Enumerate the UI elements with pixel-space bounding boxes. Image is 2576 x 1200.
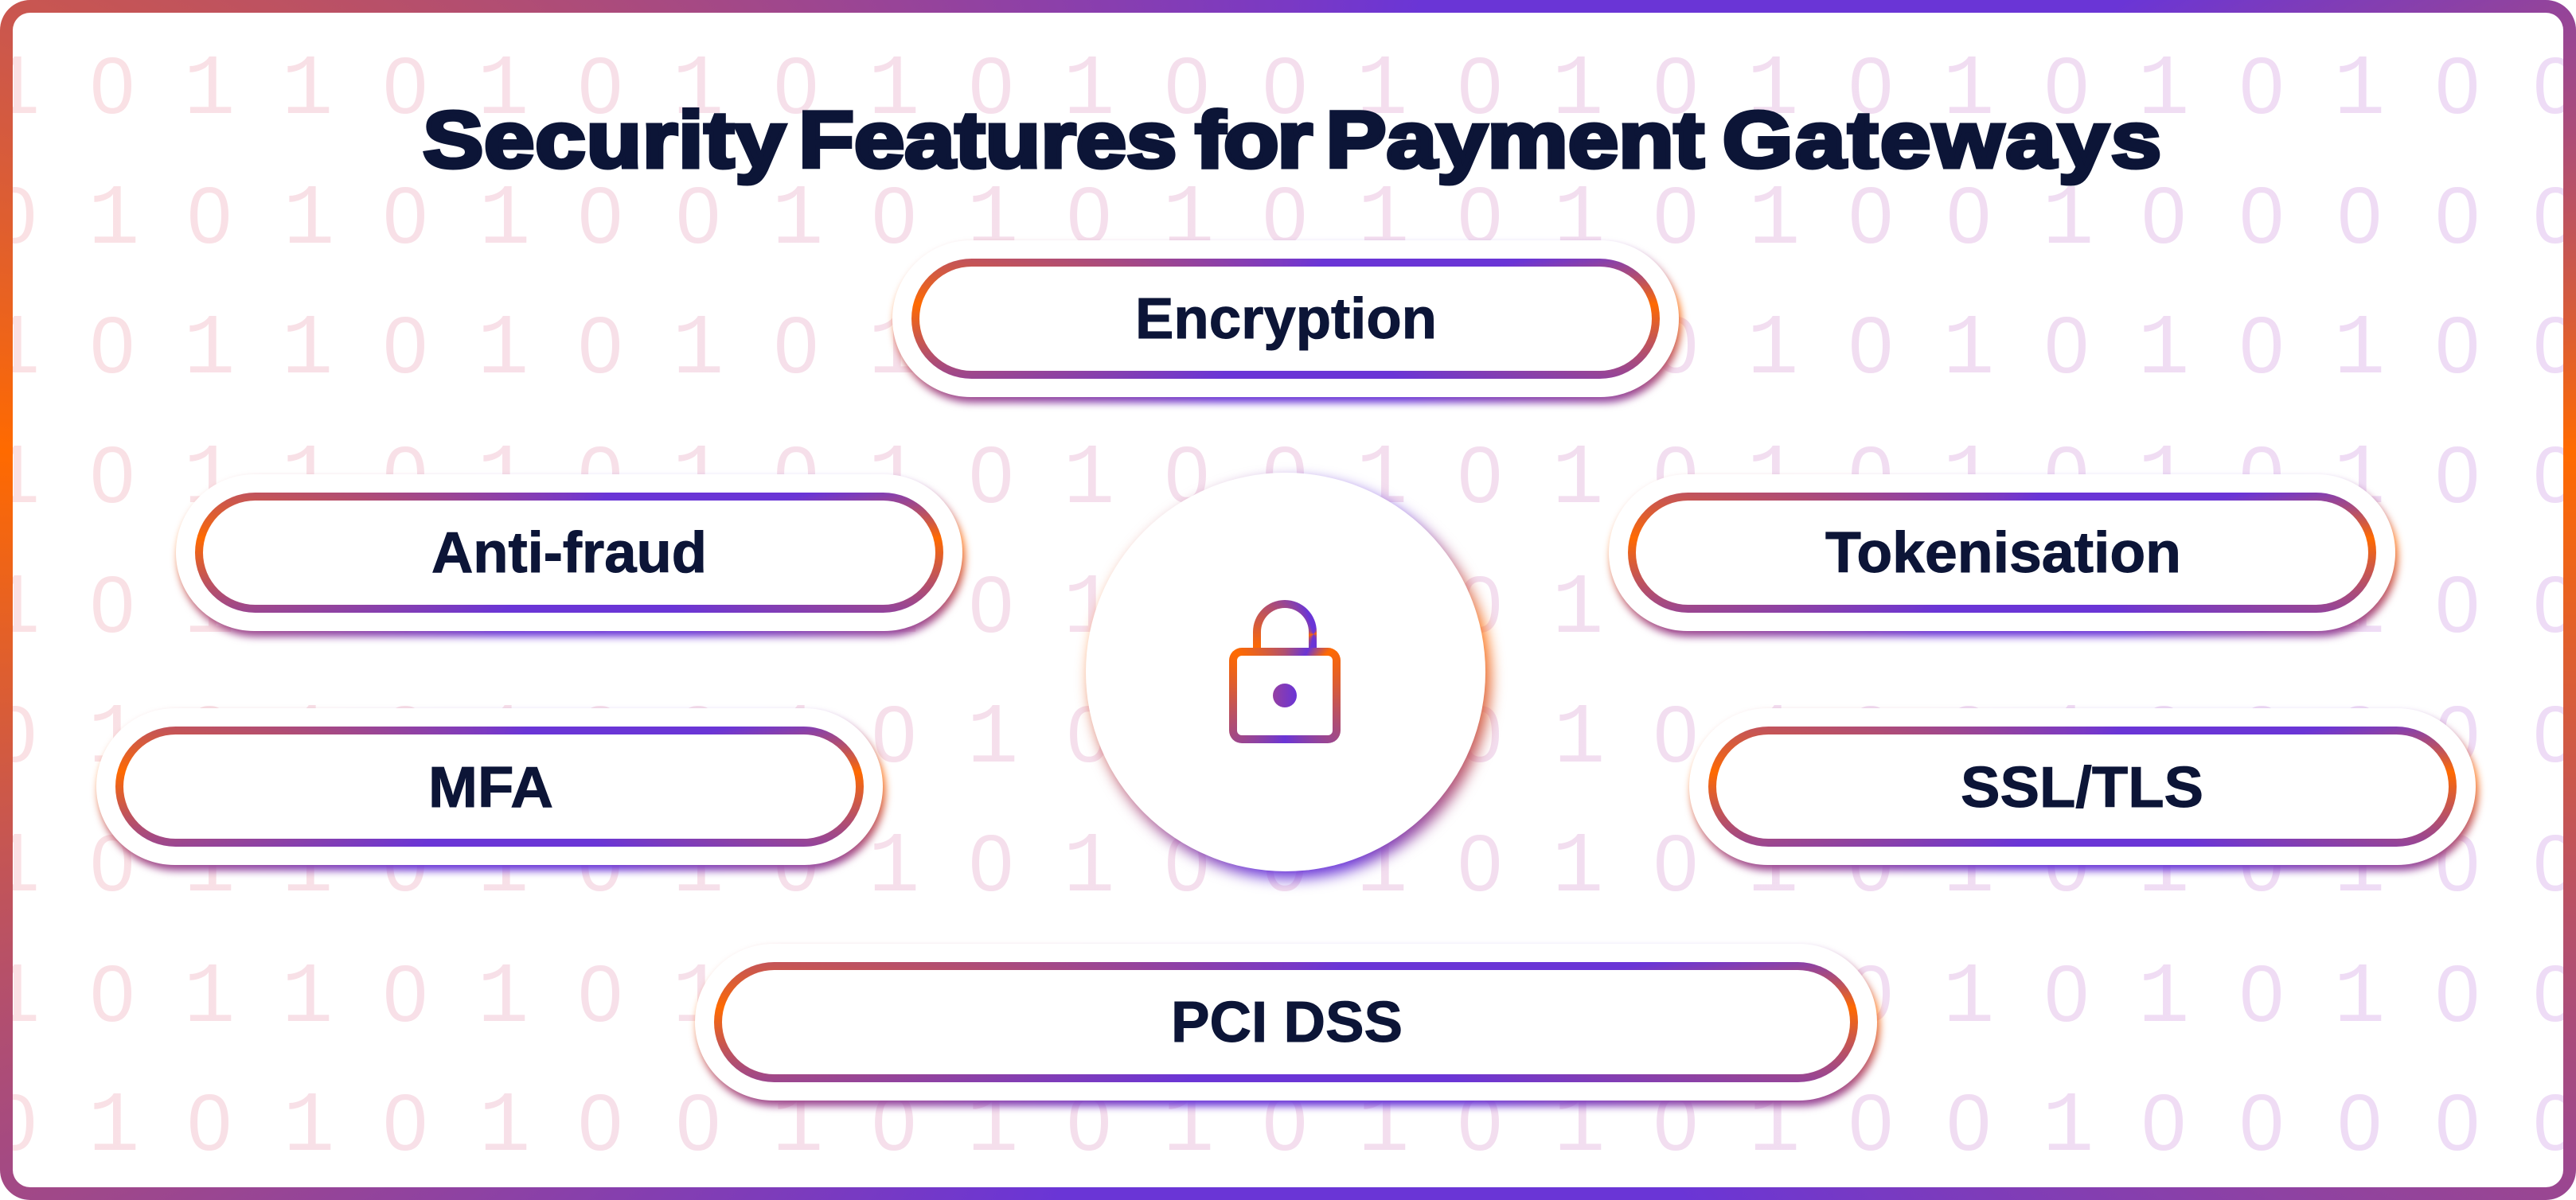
label: Encryption: Encryption [1135, 287, 1437, 351]
pill: PCI DSS [691, 942, 1887, 1112]
title: Gateways [1723, 95, 2164, 184]
binary digit pattern: 1111111111 [88, 691, 2094, 788]
binary digit pattern: 1111111111 [88, 172, 2094, 269]
binary digit pattern: 1111111111111 [13, 42, 2385, 139]
binary digit pattern: 1111111111111 [13, 561, 2385, 658]
label: MFA: MFA [428, 756, 553, 820]
pill: Anti-fraud [172, 473, 971, 643]
binary digit pattern: 00000000000000000 [13, 171, 2563, 260]
binary digit pattern: 00000000000000 [90, 301, 2563, 390]
padlock keyhole [1273, 684, 1297, 707]
title: for [1195, 95, 1312, 184]
title [423, 95, 2164, 186]
pill: MFA [92, 707, 892, 877]
title: Security [423, 95, 786, 184]
title: Payment [1326, 95, 1704, 184]
label: SSL/TLS: SSL/TLS [1961, 756, 2203, 820]
central circle with lock [1079, 468, 1502, 890]
binary digit pattern: 00000000000000000 [13, 1078, 2563, 1167]
binary digit pattern: 00000000000000 [90, 41, 2563, 131]
binary digit pattern: 1111111111111 [13, 431, 2385, 528]
label: Anti-fraud: Anti-fraud [431, 521, 707, 585]
icon: padlock [1229, 600, 1341, 743]
binary digit pattern: 00000000000000 [90, 560, 2563, 649]
label: Tokenisation: Tokenisation [1825, 521, 2181, 585]
label: PCI DSS: PCI DSS [1171, 991, 1403, 1054]
padlock shackle [1253, 600, 1317, 649]
binary digit pattern: 1111111111111 [13, 950, 2385, 1047]
pill: Tokenisation [1605, 473, 2404, 643]
binary digit pattern: 00000000000000 [90, 949, 2563, 1038]
title: Features [798, 95, 1177, 184]
pill: Encryption [888, 239, 1688, 409]
binary digit pattern: 00000000000000 [90, 431, 2563, 520]
padlock body [1229, 648, 1341, 743]
binary digit pattern: 00000000000000 [90, 819, 2563, 908]
pill: SSL/TLS [1684, 707, 2485, 877]
binary digit pattern: 1111111111111 [13, 820, 2385, 917]
binary digit pattern: 1111111111111 [13, 302, 2385, 399]
binary digit pattern: 00000000000000000 [13, 690, 2563, 779]
binary digit pattern: 1111111111 [88, 1079, 2094, 1176]
